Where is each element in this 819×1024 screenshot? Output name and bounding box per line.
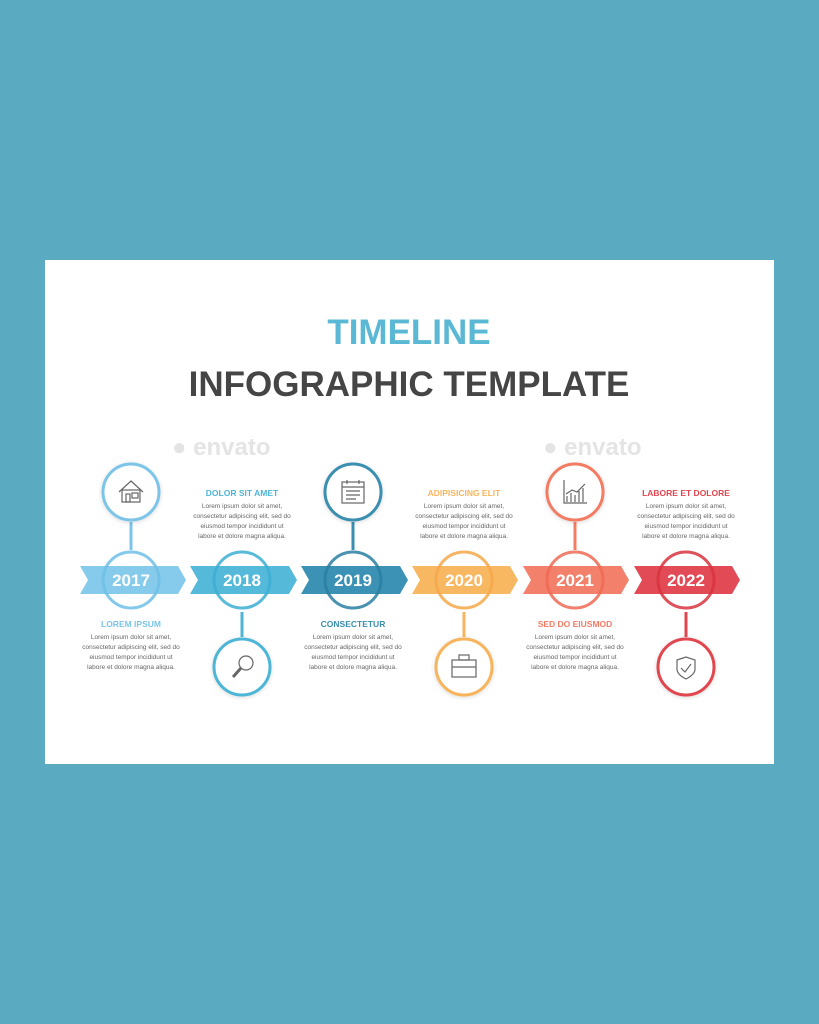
text: dolor sit amet: eiusmod tempor incididunt ut xyxy=(200,523,284,530)
icons xyxy=(119,480,695,679)
text: adipisicing elit: eiusmod tempor incididunt ut xyxy=(422,523,506,530)
title: INFOGRAPHIC TEMPLATE xyxy=(189,365,629,404)
text: sed do eiusmod: Lorem ipsum dolor sit amet, xyxy=(535,634,615,641)
text: consectetur: eiusmod tempor incididunt ut xyxy=(311,654,395,661)
text: lorem ipsum: LOREM IPSUM xyxy=(101,619,161,629)
text: consectetur: consectetur adipiscing elit, sed do xyxy=(304,644,402,651)
icon circles xyxy=(103,464,714,695)
title xyxy=(189,313,629,404)
text: labore et dolore: LABORE ET DOLORE xyxy=(642,488,730,498)
text: sed do eiusmod xyxy=(526,619,624,671)
arrow 2022 xyxy=(634,566,740,594)
arrow 2021 xyxy=(523,566,629,594)
watermarks xyxy=(172,434,642,461)
text: consectetur: CONSECTETUR xyxy=(321,619,385,629)
text: labore et dolore: eiusmod tempor incididunt ut xyxy=(644,523,728,530)
text: adipisicing elit xyxy=(415,488,513,540)
icon: house xyxy=(119,481,143,502)
text: dolor sit amet: Lorem ipsum dolor sit amet, xyxy=(202,503,282,510)
text: adipisicing elit: ADIPISICING ELIT xyxy=(428,488,501,498)
icon: chart xyxy=(564,480,587,503)
text: sed do eiusmod: labore et dolore magna aliqua. xyxy=(531,664,619,671)
text blocks xyxy=(82,488,735,671)
text: sed do eiusmod: consectetur adipiscing elit, sed do xyxy=(526,644,624,651)
text: consectetur xyxy=(304,619,402,671)
arrow 2020: 2020 xyxy=(445,571,483,590)
text: adipisicing elit: Lorem ipsum dolor sit amet, xyxy=(424,503,504,510)
icon: briefcase xyxy=(452,655,476,677)
text: lorem ipsum xyxy=(82,619,180,671)
text: adipisicing elit: consectetur adipiscing elit, sed do xyxy=(415,513,513,520)
arrow 2021: 2021 xyxy=(556,571,594,590)
connectors xyxy=(131,522,686,637)
icon: shield xyxy=(677,657,695,679)
text: consectetur: labore et dolore magna aliqua. xyxy=(309,664,397,671)
panel: white card xyxy=(45,260,774,764)
text: dolor sit amet: labore et dolore magna aliqua. xyxy=(198,533,286,540)
text: adipisicing elit: labore et dolore magna aliqua. xyxy=(420,533,508,540)
text: consectetur: Lorem ipsum dolor sit amet, xyxy=(313,634,393,641)
timeline arrows xyxy=(80,566,740,594)
arrow 2020 xyxy=(412,566,518,594)
arrow 2019: 2019 xyxy=(334,571,372,590)
text: labore et dolore xyxy=(637,488,735,540)
arrow 2017: 2017 xyxy=(112,571,150,590)
icon: calendar xyxy=(342,480,364,503)
text: dolor sit amet xyxy=(193,488,291,540)
text: sed do eiusmod: SED DO EIUSMOD xyxy=(538,619,612,629)
text: lorem ipsum: consectetur adipiscing elit, sed do xyxy=(82,644,180,651)
watermarks: ● envato xyxy=(172,434,271,461)
text: dolor sit amet: consectetur adipiscing elit, sed do xyxy=(193,513,291,520)
text: lorem ipsum: eiusmod tempor incididunt ut xyxy=(89,654,173,661)
watermarks: ● envato xyxy=(543,434,642,461)
text: sed do eiusmod: eiusmod tempor incididunt ut xyxy=(533,654,617,661)
arrow 2017 xyxy=(80,566,186,594)
text: labore et dolore: Lorem ipsum dolor sit amet, xyxy=(646,503,726,510)
arrow 2018: 2018 xyxy=(223,571,261,590)
arrow 2019 xyxy=(301,566,408,594)
text: lorem ipsum: Lorem ipsum dolor sit amet, xyxy=(91,634,171,641)
arrow 2022: 2022 xyxy=(667,571,705,590)
text: dolor sit amet: DOLOR SIT AMET xyxy=(206,488,279,498)
arrow 2018 xyxy=(190,566,297,594)
text: labore et dolore: consectetur adipiscing elit, sed do xyxy=(637,513,735,520)
text: lorem ipsum: labore et dolore magna aliqua. xyxy=(87,664,175,671)
year rings xyxy=(103,552,714,608)
icon: magnifier xyxy=(233,656,253,677)
title: TIMELINE xyxy=(327,313,491,352)
text: labore et dolore: labore et dolore magna aliqua. xyxy=(642,533,730,540)
